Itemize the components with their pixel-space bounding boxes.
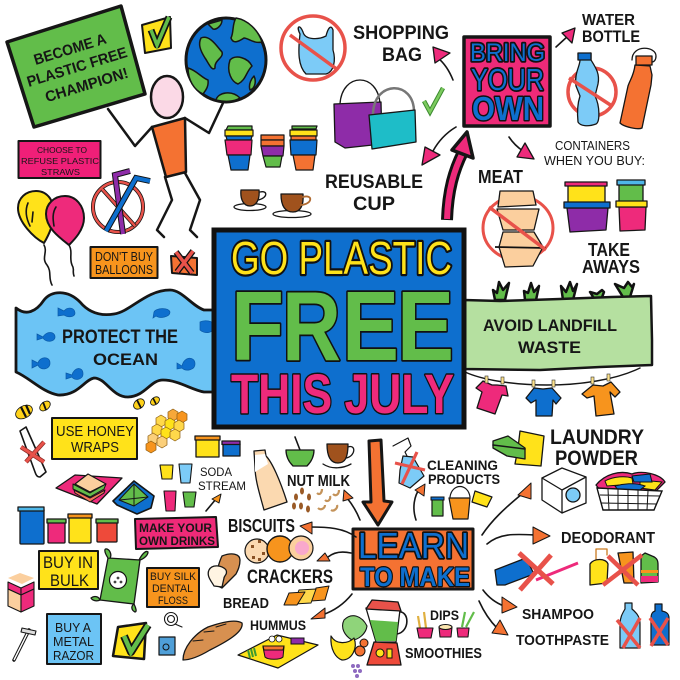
label box: buy a metal razor: METAL bbox=[53, 634, 94, 649]
label: laundry powder: POWDER bbox=[555, 447, 638, 470]
icon: soap bar and cloth bbox=[493, 431, 544, 466]
arrow: down to learn to make bbox=[363, 440, 392, 525]
label: take aways: AWAYS bbox=[582, 257, 640, 277]
arrow: to crackers bbox=[317, 552, 351, 561]
arrow: to biscuits bbox=[300, 522, 356, 537]
arrow: to water bottle bbox=[556, 28, 575, 47]
arrow: to reusable cup bbox=[422, 127, 456, 165]
panel: bring your own: OWN bbox=[472, 90, 544, 127]
icon: sandwich in wrap bbox=[56, 474, 122, 504]
label: water bottle: BOTTLE bbox=[582, 27, 640, 46]
icon: large checkbox bbox=[113, 623, 148, 659]
icon: bread loaf bbox=[208, 554, 240, 588]
label: take aways: TAKE bbox=[588, 240, 630, 260]
label: toothpaste: TOOTHPASTE bbox=[516, 632, 609, 649]
label box: make your own drinks bbox=[135, 517, 218, 549]
label box: don't buy balloons: DON'T BUY bbox=[95, 249, 153, 264]
icon: blue and green food wrap bbox=[113, 481, 154, 514]
icon: nuts bbox=[292, 488, 339, 512]
label: reusable cup: CUP bbox=[353, 194, 395, 215]
icon: washing machine bbox=[542, 468, 586, 513]
icon: reusable bags bbox=[334, 80, 416, 149]
label: soda stream: STREAM bbox=[198, 479, 246, 493]
label: hummus: HUMMUS bbox=[250, 617, 306, 633]
sign: become a plastic free champion: PLASTIC FREE bbox=[25, 44, 129, 91]
arrow: to hummus bbox=[311, 594, 352, 619]
label box: buy a metal razor bbox=[47, 614, 101, 664]
icon: balloons bbox=[18, 191, 84, 285]
arrow: to deodorant bbox=[487, 527, 550, 544]
arrow: large pink arrow up bbox=[447, 132, 473, 220]
label box: don't buy balloons bbox=[90, 247, 158, 278]
panel: main title go plastic free this july: E bbox=[342, 271, 399, 381]
label: containers when you buy bbox=[544, 139, 645, 168]
label box: buy silk dental floss: DENTAL bbox=[152, 583, 193, 595]
icon: containers yellow and blue bbox=[195, 436, 240, 457]
icon: crossed out toothpaste and toothbrush bbox=[495, 553, 578, 590]
icon: glasses of soda bbox=[160, 464, 196, 511]
label: water bottle: WATER bbox=[582, 12, 635, 29]
icon: hummus board bbox=[238, 635, 318, 668]
label: nut milk: NUT MILK bbox=[287, 473, 350, 490]
icon: green bulk sack bbox=[91, 549, 148, 612]
icon: coffee cup bbox=[323, 444, 354, 468]
icon: crackers bbox=[284, 586, 329, 605]
icon: crossed out deodorants bbox=[590, 549, 658, 585]
icon: laundry basket bbox=[596, 472, 665, 510]
label: smoothies: SMOOTHIES bbox=[405, 645, 482, 662]
label: shopping bag bbox=[353, 23, 449, 66]
icon: bulk storage containers bbox=[18, 507, 118, 544]
character: stick figure bbox=[108, 76, 223, 237]
label: shopping bag: BAG bbox=[382, 45, 422, 66]
icon: reusable cups bbox=[225, 126, 317, 170]
icon: no plastic bottle bbox=[568, 53, 616, 126]
arrow: to nut milk bbox=[343, 490, 360, 520]
panel: bring your own bbox=[464, 37, 550, 127]
label box: choose to refuse plastic straws bbox=[18, 141, 100, 178]
label box: choose to refuse plastic straws: STRAWS bbox=[41, 167, 80, 177]
arrow: to containers bbox=[509, 137, 534, 159]
label box: use honey wraps: USE HONEY bbox=[56, 423, 134, 440]
label box: buy silk dental floss: FLOSS bbox=[158, 595, 188, 607]
panel: main title go plastic free this july: THIS JULY bbox=[231, 362, 454, 425]
icon: coffee cups and saucers bbox=[234, 190, 311, 218]
icon: crossed out spray bottle bbox=[393, 438, 425, 488]
label: biscuits: BISCUITS bbox=[228, 516, 295, 536]
arrow: to soda stream bbox=[206, 494, 221, 511]
label: dips: DIPS bbox=[430, 607, 459, 623]
label box: don't buy balloons: BALLOONS bbox=[95, 262, 153, 277]
label box: buy silk dental floss: BUY SILK bbox=[150, 571, 197, 583]
arrow: to toothpaste bbox=[479, 601, 508, 635]
label: bread: BREAD bbox=[223, 595, 269, 612]
label box: buy a metal razor: RAZOR bbox=[53, 648, 94, 663]
icon: metal razor bbox=[14, 628, 36, 660]
icon: fish group bbox=[32, 308, 214, 379]
label box: make your own drinks: OWN DRINKS bbox=[139, 534, 215, 548]
icon: bees bbox=[13, 395, 161, 422]
arrow: to laundry powder bbox=[482, 483, 531, 535]
arrow: to shampoo bbox=[483, 590, 517, 613]
icon: grass on landfill bbox=[493, 282, 634, 300]
label: deodorant: DEODORANT bbox=[561, 530, 655, 547]
label: shampoo: SHAMPOO bbox=[522, 606, 594, 623]
icon: honeycomb bbox=[146, 409, 187, 453]
label: cleaning products: PRODUCTS bbox=[428, 471, 500, 487]
label: cleaning products bbox=[427, 457, 500, 487]
label: laundry powder: LAUNDRY bbox=[550, 426, 644, 449]
panel: main title go plastic free this july: GO PLASTIC bbox=[231, 232, 452, 284]
panel: protect the ocean bbox=[16, 290, 215, 397]
label: containers when you buy: CONTAINERS bbox=[555, 139, 630, 153]
icon: crossed out shampoo bottles bbox=[617, 603, 669, 648]
icon: milk bottle bbox=[254, 450, 287, 510]
icon: metal bottle bbox=[620, 48, 656, 129]
panel: learn to make: LEARN bbox=[358, 525, 469, 566]
label: reusable cup bbox=[325, 172, 423, 215]
icon: cleaning supplies bbox=[431, 486, 492, 519]
label box: buy in bulk: BUY IN bbox=[43, 553, 93, 572]
label box: choose to refuse plastic straws: REFUSE PLASTIC bbox=[21, 156, 99, 166]
label: reusable cup: REUSABLE bbox=[325, 172, 423, 193]
icon: baguette bbox=[183, 621, 242, 660]
label: shopping bag: SHOPPING bbox=[353, 23, 449, 44]
label: soda stream: SODA bbox=[200, 465, 232, 479]
label: meat: MEAT bbox=[478, 167, 523, 187]
panel: main title go plastic free this july bbox=[214, 230, 464, 427]
panel: avoid landfill waste: WASTE bbox=[518, 338, 581, 357]
icon: no plastic bag bbox=[281, 16, 345, 80]
label: laundry powder bbox=[550, 426, 644, 470]
icon: dips bbox=[417, 612, 474, 638]
icon: silk floss bbox=[159, 612, 182, 655]
panel: protect the ocean: PROTECT THE bbox=[62, 327, 178, 348]
label box: buy silk dental floss bbox=[147, 568, 199, 607]
panel: avoid landfill waste bbox=[464, 296, 652, 370]
label: soda stream bbox=[198, 465, 246, 493]
label: containers when you buy: WHEN YOU BUY: bbox=[544, 154, 645, 168]
icon: green tick bbox=[424, 88, 443, 112]
sign: become a plastic free champion: BECOME A bbox=[32, 31, 109, 69]
icon: biscuits bbox=[245, 536, 313, 563]
label: take aways bbox=[582, 240, 640, 277]
label box: make your own drinks: MAKE YOUR bbox=[139, 521, 212, 535]
sign: become a plastic free champion: CHAMPION! bbox=[43, 65, 130, 106]
panel: protect the ocean: OCEAN bbox=[93, 350, 158, 369]
icon: green bowl bbox=[286, 437, 314, 466]
label box: buy in bulk bbox=[39, 551, 98, 590]
panel: main title go plastic free this july: R bbox=[282, 271, 341, 381]
panel: bring your own: YOUR bbox=[471, 62, 544, 97]
arrow: to cleaning products bbox=[414, 484, 425, 520]
label: cleaning products: CLEANING bbox=[427, 457, 498, 473]
icon: takeaway containers bbox=[564, 180, 647, 232]
arrow: to shopping bag bbox=[433, 47, 453, 80]
label box: buy in bulk: BULK bbox=[50, 571, 90, 590]
icon: no straws bbox=[93, 171, 150, 234]
icon: crossed balloon package bbox=[171, 251, 197, 275]
icon: blender bbox=[366, 600, 407, 665]
icon: no meat packaging bbox=[483, 191, 553, 267]
icon: stacked boxes bbox=[8, 573, 34, 612]
panel: bring your own: BRING bbox=[470, 39, 545, 67]
icon: yellow checkbox bbox=[142, 17, 171, 53]
panel: learn to make bbox=[353, 525, 473, 592]
label box: use honey wraps: WRAPS bbox=[71, 439, 119, 456]
sign: become a plastic free champion bbox=[7, 6, 145, 127]
icon: globe bbox=[186, 18, 266, 102]
panel: main title go plastic free this july: E bbox=[397, 271, 454, 381]
label: crackers: CRACKERS bbox=[247, 567, 333, 588]
label box: buy a metal razor: BUY A bbox=[55, 620, 91, 635]
label box: choose to refuse plastic straws: CHOOSE TO bbox=[37, 145, 87, 155]
icon: washing line with shirts bbox=[465, 368, 640, 416]
icon: crossed out cling film roll bbox=[20, 427, 46, 477]
panel: learn to make: TO MAKE bbox=[360, 562, 470, 592]
panel: main title go plastic free this july: F bbox=[231, 271, 284, 381]
label: water bottle bbox=[582, 12, 640, 46]
label box: use honey wraps bbox=[52, 418, 137, 459]
icon: fruit and vegetables bbox=[331, 616, 368, 678]
panel: avoid landfill waste: AVOID LANDFILL bbox=[483, 316, 617, 335]
